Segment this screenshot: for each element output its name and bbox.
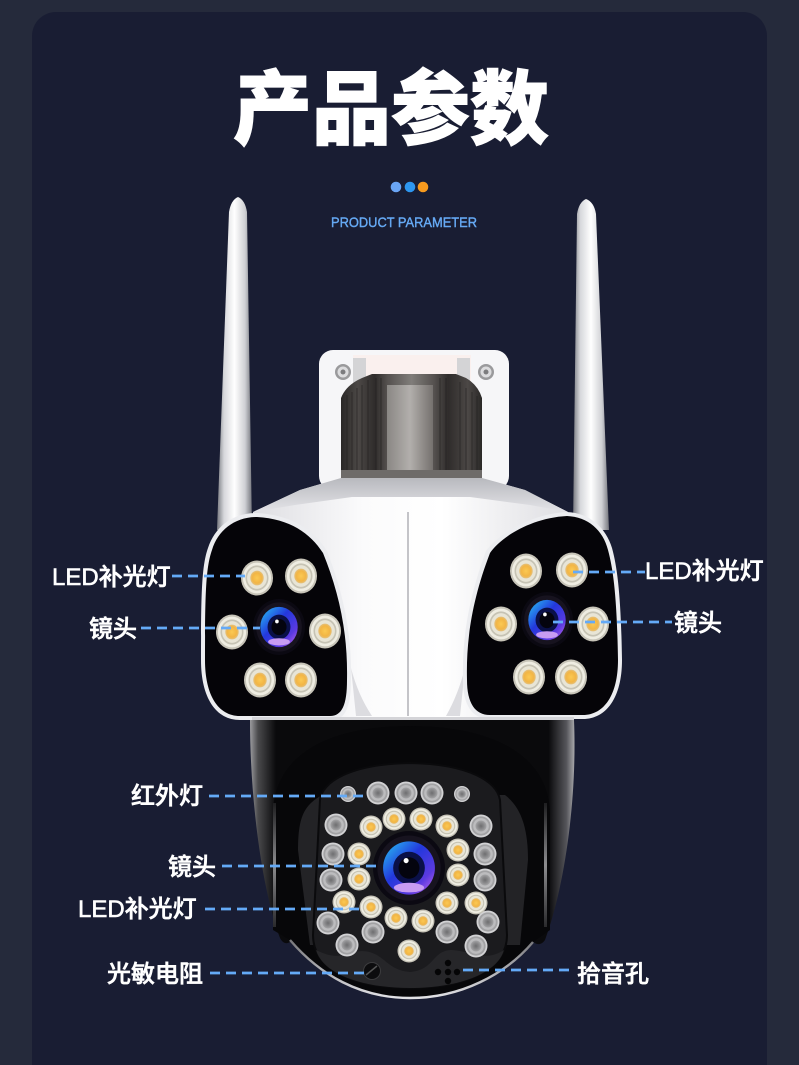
infrared lamps (316, 782, 500, 958)
white upper body (253, 478, 568, 717)
label: infrared lamp: 红外灯 (131, 783, 203, 810)
decorative three dots (391, 182, 428, 192)
subtitle: PRODUCT PARAMETER (331, 214, 477, 230)
label: dome lens: 镜头 (168, 854, 216, 881)
right housing LEDs and lens (485, 552, 609, 694)
top bright strip of lower body (252, 717, 574, 720)
mounting plate (319, 350, 509, 490)
right antenna (573, 199, 609, 530)
left housing LEDs and lens (216, 558, 341, 698)
label: right lens: 镜头 (674, 610, 722, 637)
label: right LED fill light: LED补光灯 (645, 558, 764, 585)
label: left LED fill light: LED补光灯 (52, 564, 171, 591)
right lens housing (463, 512, 622, 719)
photoresistor (364, 962, 380, 980)
dome face plate (313, 763, 507, 988)
label: photoresistor: 光敏电阻 (107, 961, 203, 988)
label: pickup hole: 拾音孔 (577, 961, 649, 988)
dome fill LEDs (332, 808, 488, 962)
support cylinder (341, 374, 482, 478)
label: left lens: 镜头 (89, 616, 137, 643)
left antenna (217, 197, 252, 530)
camera illustration (201, 197, 622, 998)
title: 产品参数 (233, 66, 549, 156)
dome lens (373, 831, 445, 905)
dome (273, 726, 550, 998)
bottom wave strip of face plate (316, 950, 504, 988)
left lens housing (201, 513, 351, 720)
pickup holes (435, 960, 460, 984)
black pan-tilt arms (250, 720, 575, 944)
label: dome LED fill light: LED补光灯 (78, 896, 197, 923)
